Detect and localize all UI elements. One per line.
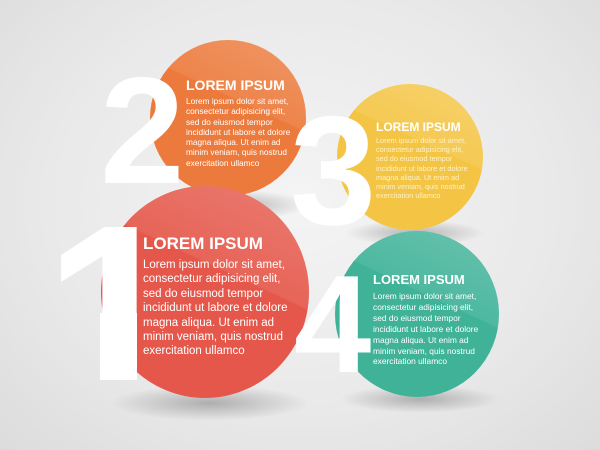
- text: teal: Lorem ipsum dolor sit amet,: [373, 291, 476, 301]
- text: teal: sed do eiusmod tempor: [373, 313, 461, 323]
- text: yellow: LOREM IPSUM: [376, 120, 461, 134]
- text: orange: incididunt ut labore et dolore: [186, 127, 290, 137]
- number 4: 4: [294, 247, 371, 402]
- text: orange: sed do eiusmod tempor: [186, 117, 273, 127]
- text: orange: [186, 77, 290, 168]
- text: red: magna aliqua. Ut enim ad: [143, 317, 274, 329]
- text: red: sed do eiusmod tempor: [143, 288, 263, 300]
- panel: yellow circle 3: [337, 84, 483, 230]
- text: red: minim veniam, quis nostrud: [143, 331, 283, 343]
- panel: teal circle 4: [335, 231, 499, 397]
- text: orange: Lorem ipsum dolor sit amet,: [186, 96, 288, 106]
- text: teal: exercitation ullamco: [373, 356, 447, 366]
- shadow: red: [110, 385, 310, 421]
- text: teal: magna aliqua. Ut enim ad: [373, 335, 468, 345]
- text: teal: minim veniam, quis nostrud: [373, 346, 475, 356]
- text: red: incididunt ut labore et dolore: [143, 302, 288, 314]
- text: red: exercitation ullamco: [143, 345, 245, 357]
- text: teal: LOREM IPSUM: [373, 272, 465, 287]
- text: teal: incididunt ut labore et dolore: [373, 324, 478, 334]
- text: yellow: consectetur adipisicing elit,: [376, 145, 463, 154]
- shadow: teal: [340, 385, 500, 413]
- text: red: consectetur adipisicing elit,: [143, 273, 280, 285]
- text: red: [143, 234, 288, 357]
- text: orange: exercitation ullamco: [186, 158, 259, 168]
- panel: red circle 1: [101, 186, 309, 398]
- text: yellow: sed do eiusmod tempor: [376, 154, 452, 163]
- text: yellow: Lorem ipsum dolor sit amet,: [376, 136, 466, 145]
- text: teal: [373, 272, 478, 366]
- text: red: Lorem ipsum dolor sit amet,: [143, 259, 285, 271]
- shadow: orange: [160, 190, 310, 220]
- text: orange: LOREM IPSUM: [186, 77, 285, 93]
- text: red: LOREM IPSUM: [143, 234, 263, 253]
- number 2: 2: [100, 46, 185, 216]
- number 3: 3: [290, 84, 376, 257]
- text: teal: consectetur adipisicing elit,: [373, 302, 473, 312]
- text: yellow: exercitation ullamco: [376, 191, 440, 200]
- text: orange: magna aliqua. Ut enim ad: [186, 137, 281, 147]
- text: orange: consectetur adipisicing elit,: [186, 106, 285, 116]
- number 1: [44, 188, 183, 380]
- text: yellow: magna aliqua. Ut enim ad: [376, 173, 459, 182]
- text: yellow: incididunt ut labore et dolore: [376, 164, 468, 173]
- text: yellow: minim veniam, quis nostrud: [376, 182, 465, 191]
- text: orange: minim veniam, quis nostrud: [186, 147, 287, 157]
- text: yellow: [376, 120, 468, 200]
- shadow: yellow: [345, 220, 485, 246]
- panel: orange circle 2: [150, 40, 306, 196]
